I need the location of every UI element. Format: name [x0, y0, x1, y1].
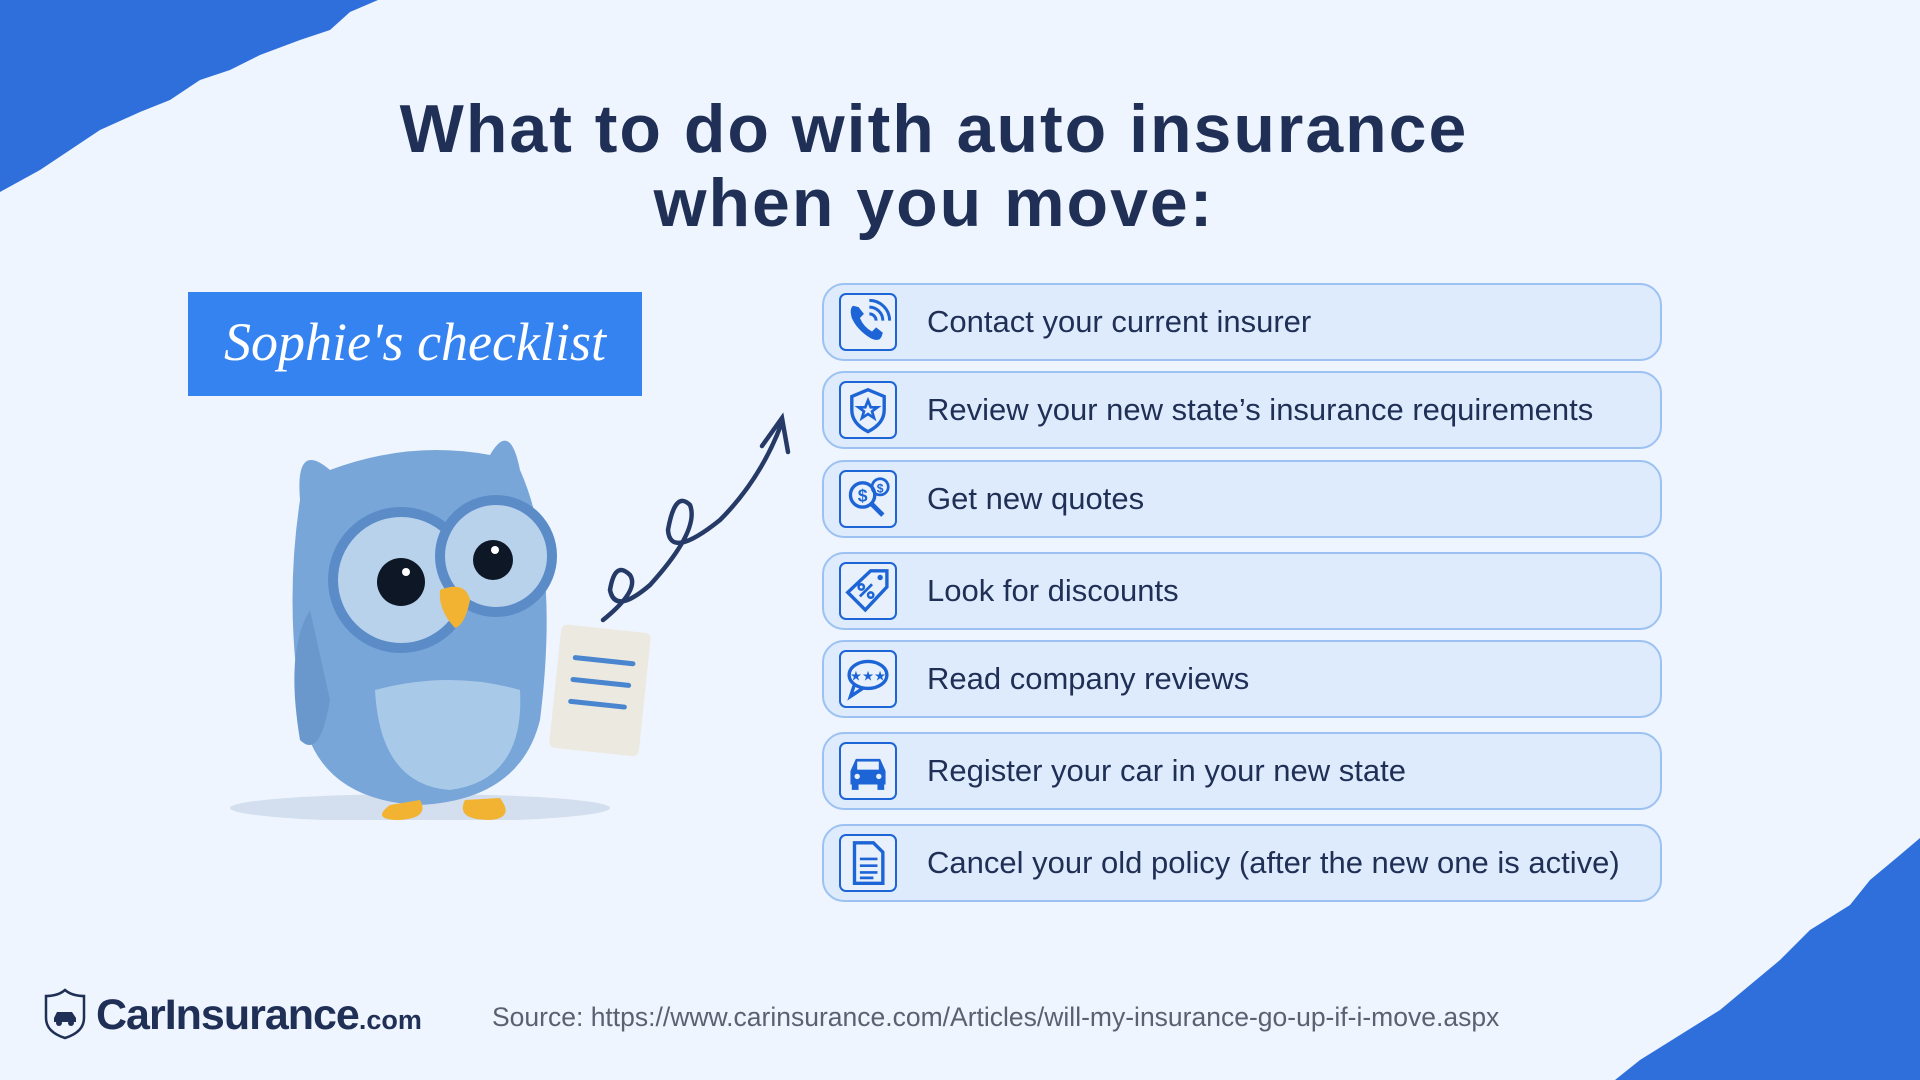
icon: quotes magnifier — [839, 470, 897, 528]
icon: review bubble — [839, 650, 897, 708]
icon: quotes magnifier: $ — [858, 486, 868, 506]
title: What to do with auto insurance — [400, 91, 1468, 167]
checklist row 7: Cancel your old policy (after the new one is active) — [927, 845, 1620, 880]
checklist row 4 — [822, 552, 1662, 630]
arrow: swirl to checklist — [600, 412, 790, 622]
corner: top-left brush — [0, 0, 378, 192]
banner: Sophie's checklist — [188, 292, 642, 396]
icon: shield star — [839, 381, 897, 439]
checklist row 5 — [822, 640, 1662, 718]
icon: discount tag — [839, 562, 897, 620]
checklist row 7 — [822, 824, 1662, 902]
banner: Sophie's checklist: Sophie's checklist — [224, 312, 606, 372]
illustration: owl with checklist — [230, 440, 650, 820]
checklist row 2 — [822, 371, 1662, 449]
title: when you move: — [654, 165, 1214, 241]
checklist row 2: Review your new state’s insurance requirements — [927, 392, 1593, 427]
icon: car — [839, 742, 897, 800]
title — [400, 91, 1468, 241]
icon: document — [839, 834, 897, 892]
checklist row 5: Read company reviews — [927, 661, 1249, 696]
icon: quotes magnifier: $ — [877, 481, 884, 495]
checklist row 6: Register your car in your new state — [927, 753, 1406, 788]
icon: review bubble: ★★★ — [850, 668, 886, 684]
checklist row 3 — [822, 460, 1662, 538]
corner: bottom-right brush — [1615, 838, 1920, 1080]
checklist row 4: Look for discounts — [927, 573, 1179, 608]
checklist row 6 — [822, 732, 1662, 810]
checklist row 1 — [822, 283, 1662, 361]
checklist row 1: Contact your current insurer — [927, 304, 1311, 339]
icon: phone — [839, 293, 897, 351]
logo: CarInsurance.com: CarInsurance.com — [96, 991, 422, 1039]
source text: Source: https://www.carinsurance.com/Articles/will-my-insurance-go-up-if-i-move.aspx — [492, 1002, 1499, 1032]
checklist row 3: Get new quotes — [927, 481, 1144, 516]
